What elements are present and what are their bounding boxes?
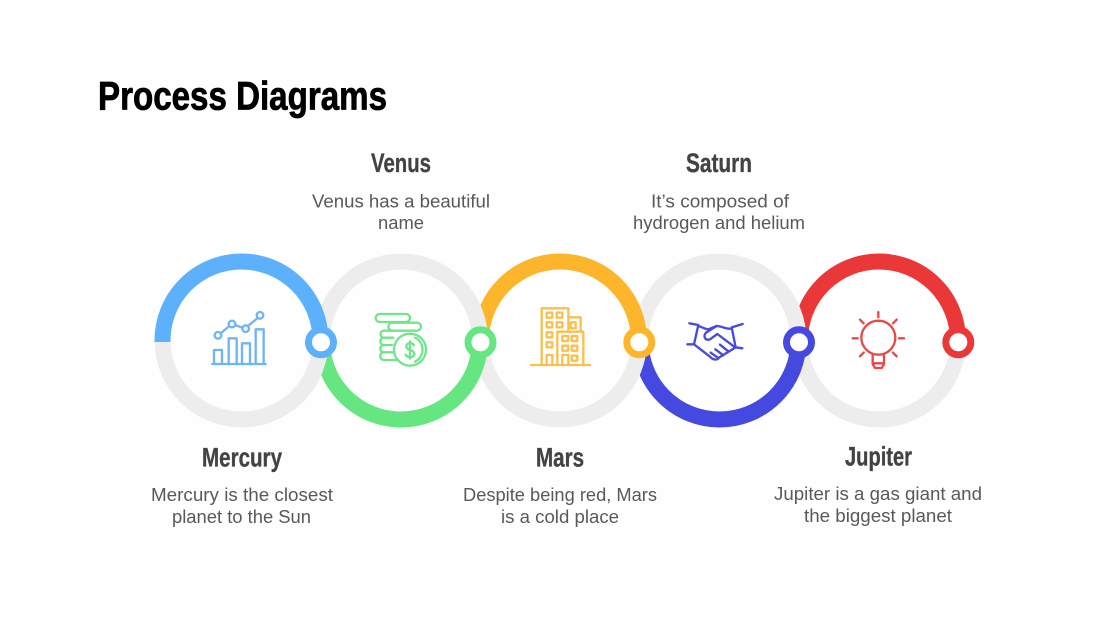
text block: Mercury: Mercury — [202, 442, 282, 472]
text block: Mars: is a cold place — [501, 507, 619, 527]
connector node: red — [946, 330, 971, 355]
ring: Jupiter — [800, 262, 958, 420]
text block: Saturn: Saturn — [686, 148, 752, 178]
connector node: blue — [308, 330, 334, 355]
text block: Saturn: hydrogen and helium — [633, 213, 805, 233]
connector node: green — [468, 330, 493, 355]
text block: Mars: Despite being red, Mars — [463, 485, 657, 505]
text block: Mercury — [151, 442, 333, 527]
ring: Venus — [322, 262, 480, 420]
icon: coins — [376, 314, 426, 366]
text block: Mars: Mars — [536, 442, 584, 472]
text block: Venus — [312, 148, 490, 233]
ring: Mars — [481, 262, 639, 420]
text block: Jupiter: the biggest planet — [804, 506, 952, 526]
text block: Mercury: planet to the Sun — [172, 507, 311, 527]
text block: Jupiter — [774, 442, 982, 526]
ring: Saturn — [640, 262, 798, 420]
icon: bar chart with trend line — [212, 312, 266, 364]
connector node: indigo — [786, 330, 812, 355]
text block: Venus: Venus — [371, 148, 431, 178]
text block: Mercury: Mercury is the closest — [151, 485, 333, 505]
text block: Saturn — [633, 148, 805, 233]
text block: Venus: name — [378, 213, 424, 233]
text block: Venus: Venus has a beautiful — [312, 192, 490, 212]
text block: Saturn: It’s composed of — [651, 192, 790, 212]
connector node: yellow — [627, 330, 652, 355]
text block: Jupiter: Jupiter — [845, 442, 912, 472]
text block: Jupiter: Jupiter is a gas giant and — [774, 484, 982, 504]
text block: Mars — [463, 442, 657, 527]
ring: Mercury — [162, 262, 320, 420]
title: Process Diagrams — [98, 74, 387, 118]
icon: handshake — [687, 323, 743, 360]
icon: buildings — [531, 308, 590, 365]
icon: light bulb — [853, 312, 904, 368]
